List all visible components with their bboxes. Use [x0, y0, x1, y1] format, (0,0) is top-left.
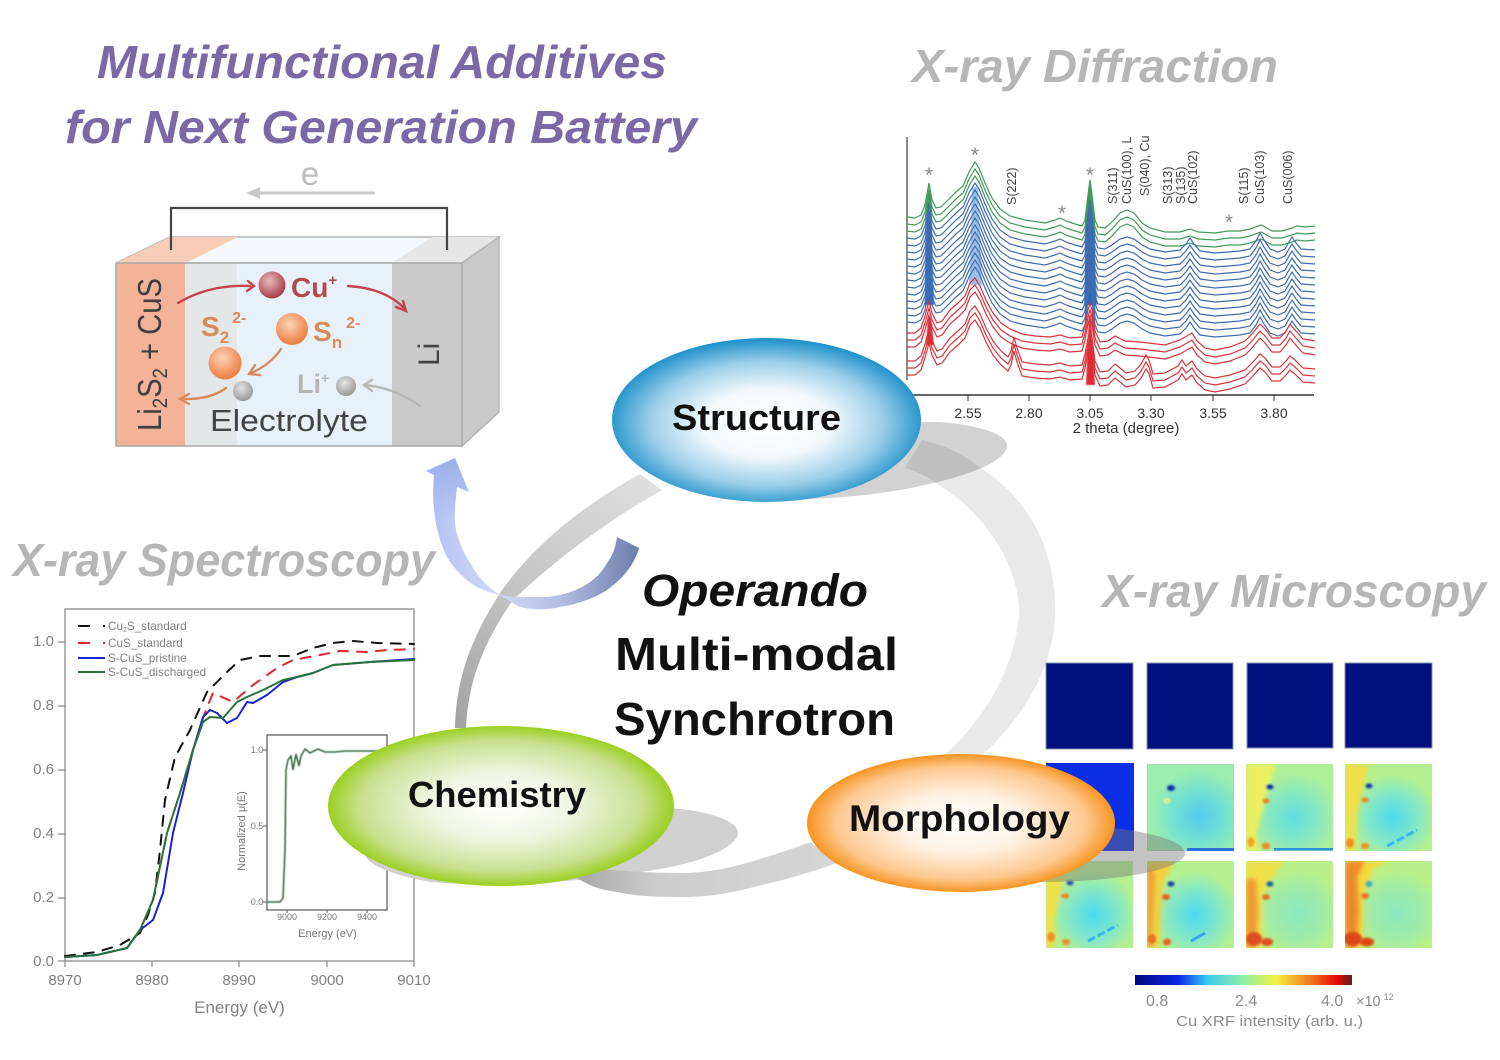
battery top face: [116, 237, 499, 263]
x axis labels: 8980: [135, 972, 169, 989]
phase labels: S(222): [1005, 167, 1019, 205]
polysulfide Sn: [276, 313, 360, 352]
inset chart: 9400: [357, 912, 377, 922]
y axis labels: 0.0: [33, 953, 54, 970]
node: Morphology: Morphology: [849, 798, 1070, 839]
x axis labels: 8970: [48, 972, 82, 989]
title: [65, 36, 700, 153]
row 3 column 1 map: [1046, 861, 1133, 948]
tick labels: 3.05: [1076, 405, 1104, 421]
inset chart: 1.0: [251, 745, 263, 755]
node: Morphology: [807, 754, 1115, 892]
inset chart: Normalized μ(E): [236, 791, 248, 871]
X-ray microscopy heat maps: [1046, 663, 1432, 1030]
shadow: morphology: [895, 824, 1185, 882]
reaction arrows: [178, 281, 420, 406]
x axis labels: 8990: [222, 972, 256, 989]
phase labels: [1005, 136, 1295, 205]
title: Multifunctional Additives: [97, 36, 667, 88]
node: Chemistry: Chemistry: [408, 774, 586, 815]
node: Structure: [612, 338, 921, 502]
x axis labels: [48, 972, 431, 989]
row 2 column 4 map: [1345, 764, 1432, 851]
colour bar labels: 2.4: [1235, 993, 1257, 1010]
heading: X-ray Microscopy: X-ray Microscopy: [1099, 565, 1488, 617]
blue curves: [907, 183, 1315, 337]
cathode label: 2: [149, 398, 172, 408]
polysulfide Sn: S: [313, 316, 332, 347]
cathode label: Li: [131, 405, 168, 431]
row 2 column 3 map: [1246, 764, 1333, 851]
phase labels: S(311): [1106, 167, 1120, 204]
row 3 column 3 map: [1246, 861, 1333, 948]
copper ion: Cu: [291, 272, 328, 303]
legend: 2: [123, 627, 127, 634]
polysulfide S2: 2: [220, 328, 229, 347]
copper ion: +: [328, 272, 337, 289]
phase labels: S(040), Cu: [1138, 136, 1152, 196]
X-ray spectroscopy chart: [33, 609, 431, 1017]
phase labels: S(115): [1237, 167, 1251, 204]
X-ray diffraction chart: [907, 136, 1315, 437]
heading: X-ray Diffraction: X-ray Diffraction: [909, 40, 1278, 92]
copper ion: [258, 272, 337, 303]
x axis labels: 9000: [310, 972, 344, 989]
central text: Synchrotron: [614, 693, 895, 745]
colour bar labels: Cu XRF intensity (arb. u.): [1176, 1013, 1363, 1030]
phase labels: CuS(100), L: [1120, 137, 1134, 204]
node: Structure: Structure: [672, 397, 841, 438]
row 3 column 2 map: [1147, 861, 1234, 948]
asterisks: *: [1086, 164, 1094, 187]
polysulfide Sn: n: [332, 333, 342, 352]
asterisks: *: [1058, 202, 1066, 225]
inset chart: 0.5: [251, 821, 263, 831]
inset chart: 0.0: [251, 897, 263, 907]
battery front face: [116, 263, 462, 446]
y axis labels: 0.8: [33, 697, 54, 714]
inset chart: 9000: [277, 912, 297, 922]
heading: X-ray Spectroscopy: X-ray Spectroscopy: [10, 534, 437, 586]
y axis labels: 0.6: [33, 761, 54, 778]
tick labels: 2.55: [954, 405, 982, 421]
curves: [65, 641, 414, 957]
electrolyte label: Electrolyte: [210, 403, 368, 438]
phase labels: S(135): [1174, 166, 1188, 204]
anode label: Li: [413, 343, 446, 366]
phase labels: CuS(102): [1186, 150, 1200, 204]
colour bar labels: ×10: [1356, 994, 1381, 1010]
phase labels: CuS(006): [1281, 150, 1295, 204]
x axis labels: 9010: [397, 972, 431, 989]
polysulfide S2: [201, 310, 246, 380]
cathode label: S: [131, 378, 168, 398]
cycle ring: [455, 440, 1055, 897]
battery side face: [462, 237, 499, 446]
external wire: [171, 208, 447, 250]
y axis labels: 0.4: [33, 825, 54, 842]
colour bar labels: 0.8: [1146, 993, 1168, 1010]
central text: Multi-modal: [615, 628, 898, 680]
polysulfide Sn: 2-: [346, 315, 360, 332]
battery schematic: [116, 155, 499, 446]
axis title: 2 theta (degree): [1073, 420, 1179, 437]
axes: [907, 137, 1314, 401]
row 2 column 1 map: [1046, 763, 1134, 851]
asterisks: *: [971, 144, 979, 167]
central text: [614, 565, 898, 745]
polysulfide S2: 2-: [232, 310, 246, 327]
x axis title: Energy (eV): [194, 998, 285, 1017]
lithium ions: +: [321, 370, 329, 386]
shadow: chemistry: [365, 808, 738, 884]
tick labels: [955, 408, 1288, 418]
legend: S_standard: [127, 620, 187, 633]
phase labels: CuS(103): [1253, 150, 1267, 204]
legend: [78, 620, 206, 679]
inset chart: [236, 735, 387, 940]
legend: S-CuS_discharged: [108, 666, 206, 679]
colour bar labels: 12: [1384, 992, 1394, 1002]
tick labels: 3.30: [1137, 405, 1165, 421]
legend: CuS_standard: [108, 637, 183, 650]
asterisks: [925, 148, 1233, 222]
solid peak columns: [925, 180, 1097, 385]
plot frame: [65, 609, 414, 961]
legend: Cu: [108, 620, 123, 633]
curved blue arrow: [426, 458, 639, 609]
colour bar: [1135, 975, 1352, 985]
tick labels: 3.55: [1199, 405, 1227, 421]
green curves: [907, 162, 1315, 247]
y axis labels: 0.2: [33, 889, 54, 906]
colour bar labels: 4.0: [1321, 993, 1343, 1010]
electron arrow: e: [301, 155, 319, 192]
title: for Next Generation Battery: [65, 101, 700, 153]
ring: bottom arc: [577, 842, 837, 897]
legend: S-CuS_pristine: [108, 652, 187, 665]
lithium ions: [233, 369, 356, 401]
row 2 column 2 map: [1147, 764, 1234, 851]
central text: Operando: [642, 565, 868, 616]
asterisks: *: [925, 164, 933, 187]
tick labels: 2.80: [1015, 405, 1043, 421]
ticks: [58, 642, 414, 967]
y axis labels: [33, 633, 54, 970]
inset chart: 9200: [317, 912, 337, 922]
row 3 column 4 map: [1344, 861, 1432, 948]
red curves: [907, 278, 1315, 392]
tick labels: 3.80: [1260, 405, 1288, 421]
shadow: structure: [760, 422, 1007, 500]
lithium ions: Li: [297, 369, 321, 399]
inset chart: Energy (eV): [298, 928, 357, 940]
cathode label: + CuS: [131, 278, 168, 368]
electron arrow: [246, 155, 375, 199]
y axis labels: 1.0: [33, 633, 54, 650]
ring: left arc: [455, 474, 662, 728]
node: Chemistry: [328, 726, 674, 886]
polysulfide S2: S: [201, 311, 220, 342]
phase labels: S(313): [1161, 166, 1175, 204]
row 1: dark maps: [1046, 663, 1432, 749]
asterisks: *: [1225, 211, 1233, 234]
ring: right arc: [905, 440, 1055, 756]
cathode label: 2: [149, 368, 172, 378]
colour bar labels: [1146, 992, 1394, 1030]
